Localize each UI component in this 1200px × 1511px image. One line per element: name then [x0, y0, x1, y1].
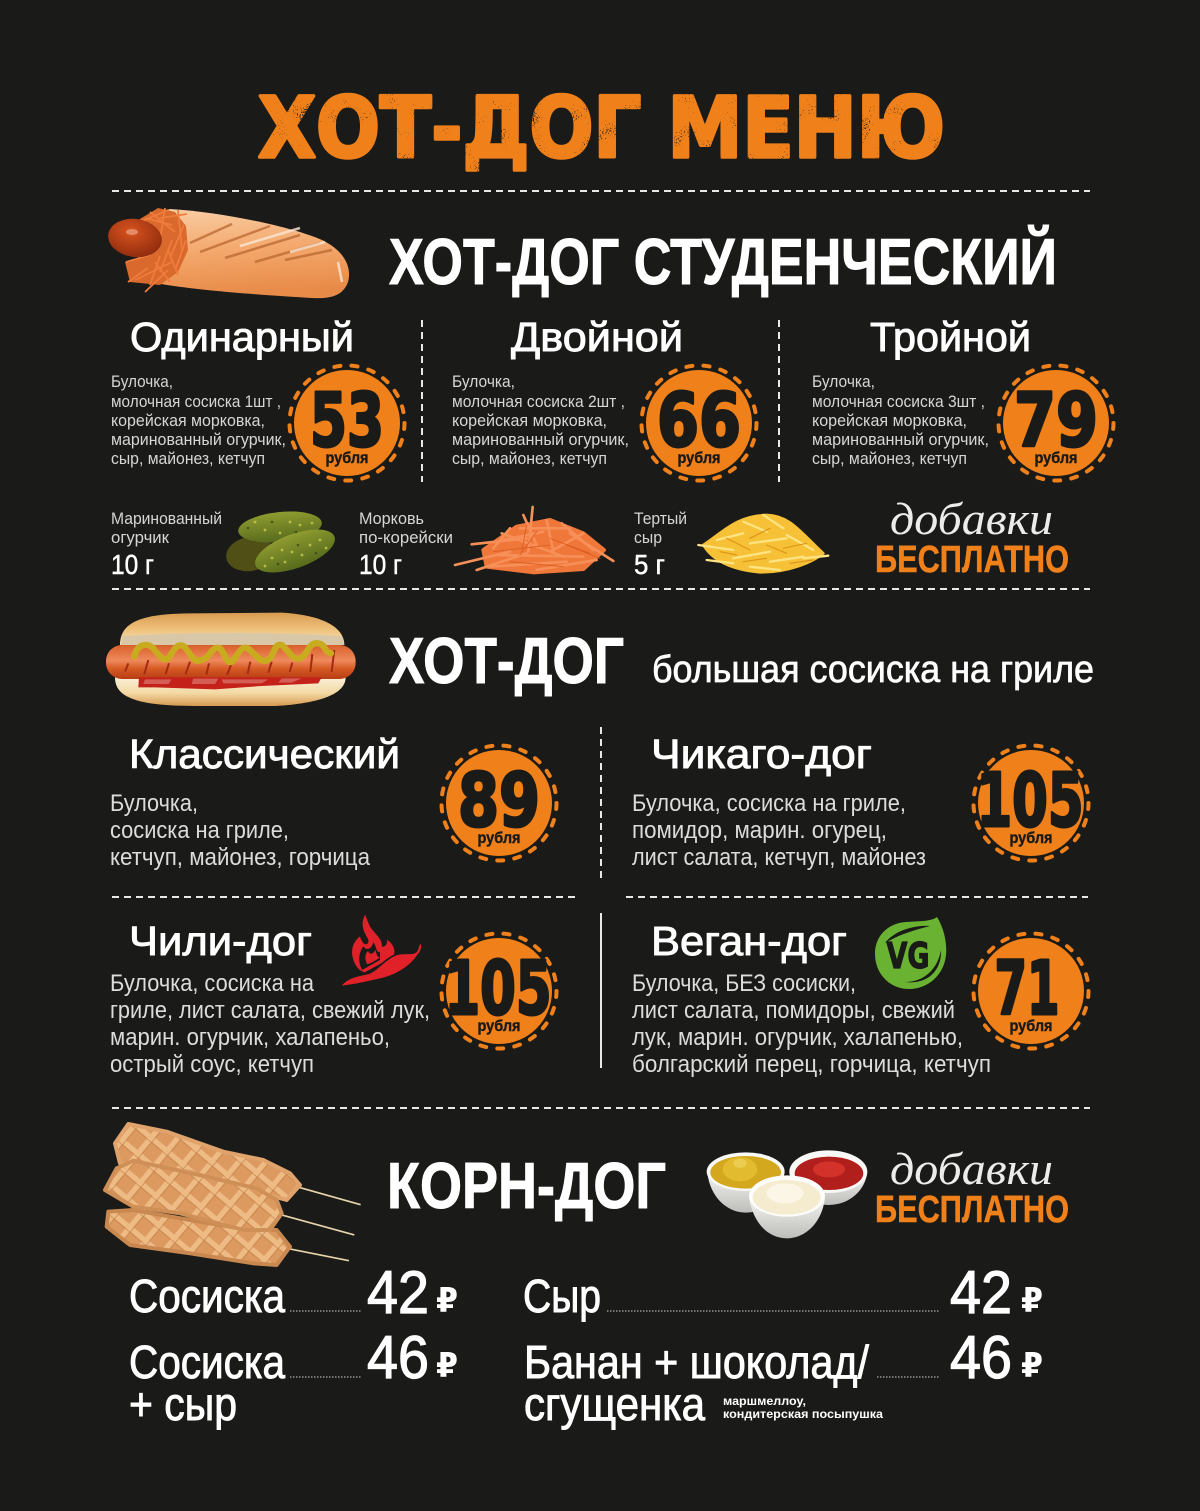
icon: vegan badge: [875, 917, 946, 989]
topping: pickle: [111, 510, 222, 580]
price badge: 66: 66: [657, 378, 741, 464]
item: chicago: [632, 731, 926, 871]
item: vegan: Булочка, БЕЗ сосиски,: [632, 970, 856, 997]
subheading: большая сосиска на гриле: [652, 649, 1094, 691]
topping: carrot: по-корейски: [359, 529, 453, 547]
item: chili: острый соус, кетчуп: [110, 1051, 314, 1078]
illustration: student hot dog: [106, 208, 349, 298]
price badge: 66: [642, 366, 756, 480]
price badge: 105: 105: [976, 758, 1084, 844]
price row: sausage and cheese: ₽: [436, 1346, 458, 1386]
price row: cheese: ₽: [1021, 1281, 1043, 1321]
item: triple: сыр, майонез, кетчуп: [812, 450, 967, 468]
item: classic: Классический: [129, 731, 400, 777]
price row: banana and chocolate: кондитерская посыпушка: [723, 1409, 884, 1421]
panel: student hot dog: [106, 208, 1114, 480]
free add-ons callout: [875, 1143, 1069, 1231]
item: chicago: лист салата, кетчуп, майонез: [632, 844, 926, 871]
item: vegan: лук, марин. огурчик, халапенью,: [632, 1024, 963, 1051]
topping: cheese: [634, 510, 687, 580]
price row: banana and chocolate: сгущенка: [524, 1378, 705, 1430]
price badge: 105: рубля: [1010, 830, 1052, 847]
item: vegan: болгарский перец, горчица, кетчуп: [632, 1051, 991, 1078]
title: ХОТ-ДОГ МЕНЮ: [258, 79, 945, 177]
price row: sausage: 42: [367, 1259, 429, 1326]
price badge: 105: 105: [444, 946, 552, 1032]
item: chicago: Чикаго-дог: [651, 731, 872, 777]
price row: sausage: ₽: [436, 1281, 458, 1321]
price badge: 53: 53: [310, 378, 384, 464]
free add-ons callout: БЕСПЛАТНО: [875, 1189, 1069, 1231]
item: double: молочная сосиска 2шт ,: [452, 393, 625, 411]
price row: sausage and cheese: + сыр: [129, 1378, 237, 1430]
price badge: 105: [974, 746, 1088, 860]
item: double: [452, 314, 683, 468]
item: triple: молочная сосиска 3шт ,: [812, 393, 985, 411]
price badge: 89: рубля: [478, 830, 520, 847]
free add-ons callout: добавки: [890, 1143, 1053, 1194]
free add-ons callout: [875, 493, 1069, 581]
item: double: корейская морковка,: [452, 412, 607, 430]
price row: banana and chocolate: ₽: [1021, 1346, 1043, 1386]
topping: pickle: Маринованный: [111, 510, 222, 528]
topping: cheese: сыр: [634, 529, 662, 547]
price badge: 89: [442, 746, 556, 860]
heading: КОРН-ДОГ: [387, 1149, 666, 1222]
panel: corn dog: [105, 1124, 1069, 1430]
price badge: 79: 79: [1014, 378, 1098, 464]
item: single: корейская морковка,: [111, 412, 265, 430]
heading: ХОТ-ДОГ: [389, 624, 624, 697]
price row: cheese: 42: [950, 1259, 1012, 1326]
price row: sausage: [129, 1259, 458, 1326]
item: double: Двойной: [511, 314, 683, 360]
price badge: 53: [290, 366, 404, 480]
item: classic: [110, 731, 400, 871]
topping: cheese: Тертый: [634, 510, 687, 528]
price badge: 105: [442, 934, 556, 1048]
price badge: 89: 89: [458, 758, 540, 844]
free add-ons callout: добавки: [890, 493, 1053, 544]
item: triple: [812, 314, 1031, 468]
icon: pickles: [223, 508, 340, 581]
item: single: сыр, майонез, кетчуп: [111, 450, 265, 468]
free add-ons callout: БЕСПЛАТНО: [875, 539, 1069, 581]
item: chili: марин. огурчик, халапеньо,: [110, 1024, 390, 1051]
illustration: corn dogs: [105, 1124, 361, 1265]
price badge: 79: [998, 366, 1114, 480]
item: chicago: Булочка, сосиска на гриле,: [632, 790, 906, 817]
item: classic: сосиска на гриле,: [110, 817, 289, 844]
item: chili: гриле, лист салата, свежий лук,: [110, 997, 430, 1024]
price badge: 53: рубля: [326, 450, 368, 467]
price row: banana and chocolate: маршмеллоу,: [723, 1396, 806, 1408]
item: vegan: [632, 918, 991, 1078]
illustration: hot dog: [106, 613, 356, 706]
topping: carrot: [359, 510, 453, 580]
icon: carrot shreds: [455, 507, 613, 572]
item: triple: маринованный огурчик,: [812, 431, 989, 449]
price row: banana and chocolate: [524, 1324, 1043, 1430]
price badge: 66: рубля: [678, 450, 720, 467]
icon: chili pepper: [340, 914, 422, 987]
icon: sauce bowls: [707, 1150, 867, 1238]
topping: pickle: огурчик: [111, 529, 170, 547]
icon: vegan badge: VG: [886, 936, 930, 977]
topping: carrot: Морковь: [359, 510, 424, 528]
price row: sausage: Сосиска: [129, 1270, 285, 1322]
item: vegan: Веган-дог: [651, 918, 847, 964]
item: triple: Булочка,: [812, 373, 875, 391]
price badge: 79: рубля: [1034, 450, 1078, 467]
item: vegan: лист салата, помидоры, свежий: [632, 997, 955, 1024]
item: chili: Булочка, сосиска на: [110, 970, 315, 997]
price row: banana and chocolate: Банан + шоколад/: [524, 1336, 869, 1388]
price row: sausage and cheese: [129, 1324, 458, 1430]
item: triple: Тройной: [870, 314, 1031, 360]
item: single: Булочка,: [111, 373, 173, 391]
item: double: сыр, майонез, кетчуп: [452, 450, 607, 468]
item: chili: [110, 918, 430, 1078]
price badge: 71: 71: [994, 946, 1060, 1032]
panel: toppings: [111, 493, 1069, 581]
heading: ХОТ-ДОГ СТУДЕНЧЕСКИЙ: [389, 225, 1057, 298]
item: double: маринованный огурчик,: [452, 431, 629, 449]
panel: big hot dog: [106, 613, 1094, 1078]
topping: pickle: 10 г: [111, 549, 154, 580]
item: single: молочная сосиска 1шт ,: [111, 393, 281, 411]
item: classic: Булочка,: [110, 790, 198, 817]
topping: carrot: 10 г: [359, 549, 402, 580]
item: chicago: помидор, марин. огурец,: [632, 817, 887, 844]
price badge: 71: рубля: [1010, 1018, 1052, 1035]
price row: sausage and cheese: Сосиска: [129, 1336, 285, 1388]
price row: cheese: Сыр: [523, 1270, 601, 1322]
topping: cheese: 5 г: [634, 549, 665, 580]
price row: sausage and cheese: 46: [367, 1324, 429, 1391]
item: single: маринованный огурчик,: [111, 431, 286, 449]
price badge: 105: рубля: [478, 1018, 520, 1035]
item: triple: корейская морковка,: [812, 412, 967, 430]
item: classic: кетчуп, майонез, горчица: [110, 844, 371, 871]
item: single: [111, 314, 354, 468]
price row: banana and chocolate: 46: [950, 1324, 1012, 1391]
item: double: Булочка,: [452, 373, 515, 391]
item: chili: Чили-дог: [129, 918, 312, 964]
icon: grated cheese: [698, 515, 828, 572]
price badge: 71: [974, 934, 1088, 1048]
item: single: Одинарный: [130, 314, 354, 360]
price row: cheese: [523, 1259, 1043, 1326]
